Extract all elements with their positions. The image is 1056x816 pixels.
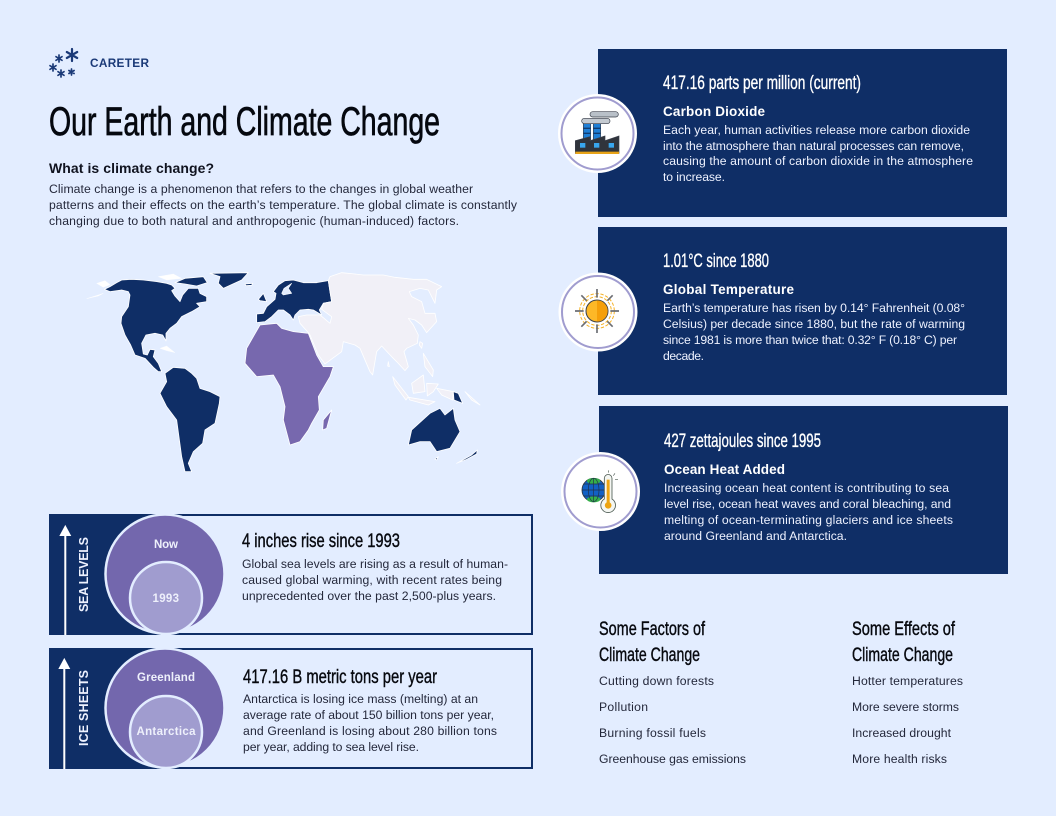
label: sea levels: SEA LEVELS — [77, 537, 91, 612]
panel: global temperature: Earth’s temperature has risen by 0.14° Fahrenheit (0.08° — [663, 301, 965, 315]
icon: sun — [558, 272, 638, 352]
map: Oceania — [408, 392, 477, 463]
panel: ocean heat: Increasing ocean heat content is contributing to sea — [664, 481, 949, 495]
logo: Careter: CARETER — [90, 56, 149, 70]
intro text block: changing due to both natural and anthropogenic (human-induced) factors. — [49, 214, 459, 228]
panel: ocean heat — [599, 406, 1008, 574]
panel: carbon dioxide: 417.16 parts per million (current) — [663, 72, 861, 94]
circle labels: ice sheets: Greenland — [137, 672, 195, 684]
intro text block: patterns and their effects on the earth’s temperature. The global climate is constantly — [49, 198, 518, 212]
panel: carbon dioxide — [598, 49, 1007, 217]
panel: global temperature: Global Temperature — [663, 282, 794, 297]
panel: ice sheets — [49, 648, 532, 769]
list: factors of climate change: Climate Change — [599, 644, 700, 666]
circle labels: sea levels — [152, 539, 179, 605]
list: effects of climate change: Climate Change — [852, 644, 953, 666]
panel: global temperature: 1.01°C since 1880 — [663, 250, 769, 272]
panel: ocean heat: 427 zettajoules since 1995 — [664, 430, 821, 452]
panel: ocean heat: Ocean Heat Added — [664, 462, 785, 477]
text: sea levels: caused global warming, with recent rates being — [242, 573, 502, 587]
panel: global temperature: decade. — [663, 349, 704, 363]
intro text block: Climate change is a phenomenon that refers to the changes in global weather — [49, 182, 473, 196]
panel: ocean heat: around Greenland and Antarctica. — [664, 529, 847, 543]
text: ice sheets: Antarctica is losing ice mass (melting) at an — [243, 692, 478, 706]
circle labels: sea levels: 1993 — [152, 593, 179, 605]
text: ice sheets: 417.16 B metric tons per year — [243, 666, 437, 688]
title: Our Earth and Climate Change — [49, 100, 440, 144]
circle labels: sea levels: Now — [154, 539, 178, 551]
list: effects of climate change: More health risks — [852, 752, 947, 766]
text: ice sheets: average rate of about 150 billion tons per year, — [243, 708, 494, 722]
text: ice sheets: per year, adding to sea level rise. — [243, 740, 419, 754]
map: Africa — [245, 323, 333, 445]
list: effects of climate change — [852, 618, 963, 766]
text: sea levels — [242, 530, 508, 603]
logo: Careter — [50, 49, 149, 77]
panel: carbon dioxide: causing the amount of carbon dioxide in the atmosphere — [663, 154, 973, 168]
circle labels: ice sheets — [136, 672, 196, 738]
world map — [87, 273, 480, 472]
panel: ocean heat: melting of ocean-terminating glaciers and ice sheets — [664, 513, 953, 527]
list: factors of climate change: Pollution — [599, 700, 648, 714]
label: ice sheets: ICE SHEETS — [77, 670, 91, 746]
list: effects of climate change: Some Effects of — [852, 618, 955, 640]
circle labels: ice sheets: Antarctica — [136, 726, 196, 738]
intro text block — [49, 160, 518, 228]
text: sea levels: 4 inches rise since 1993 — [242, 530, 400, 552]
text: ice sheets: and Greenland is losing about 280 billion tons — [243, 724, 497, 738]
panel: carbon dioxide: into the atmosphere than natural processes can remove, — [663, 139, 964, 153]
map: Asia — [298, 273, 480, 405]
list: effects of climate change: More severe storms — [852, 700, 959, 714]
text: ice sheets — [243, 666, 497, 754]
map: Americas — [87, 273, 253, 472]
text: sea levels: unprecedented over the past 2,500-plus years. — [242, 589, 496, 603]
circle: greenland — [106, 648, 224, 768]
circle: 1993 — [130, 562, 202, 634]
icon: factory — [558, 94, 637, 173]
list: factors of climate change — [599, 618, 746, 766]
map: Europe — [257, 280, 332, 323]
list: factors of climate change: Burning fossil fuels — [599, 726, 706, 740]
panel: ocean heat: level rise, ocean heat waves and coral bleaching, and — [664, 497, 951, 511]
panel: sea levels — [49, 514, 532, 635]
circle: antarctica — [130, 696, 202, 768]
list: factors of climate change: Cutting down forests — [599, 674, 714, 688]
panel: global temperature — [598, 227, 1007, 395]
panel: global temperature: Celsius) per decade since 1880, but the rate of warming — [663, 317, 965, 331]
panel: carbon dioxide: Carbon Dioxide — [663, 104, 765, 119]
intro text block: What is climate change? — [49, 160, 214, 176]
circle: now — [106, 514, 224, 634]
arrow: sea levels — [61, 527, 70, 635]
list: effects of climate change: Hotter temperatures — [852, 674, 963, 688]
icon: globe and thermometer — [561, 452, 640, 531]
list: factors of climate change: Some Factors of — [599, 618, 705, 640]
panel: global temperature: since 1981 is more than twice that: 0.32° F (0.18° C) per — [663, 333, 957, 347]
text: sea levels: Global sea levels are rising as a result of human- — [242, 557, 508, 571]
list: factors of climate change: Greenhouse gas emissions — [599, 752, 746, 766]
panel: carbon dioxide: Each year, human activities release more carbon dioxide — [663, 123, 970, 137]
arrow: ice sheets — [60, 660, 69, 769]
icon: snowflakes — [50, 49, 77, 77]
panel: carbon dioxide: to increase. — [663, 170, 725, 184]
list: effects of climate change: Increased drought — [852, 726, 952, 740]
